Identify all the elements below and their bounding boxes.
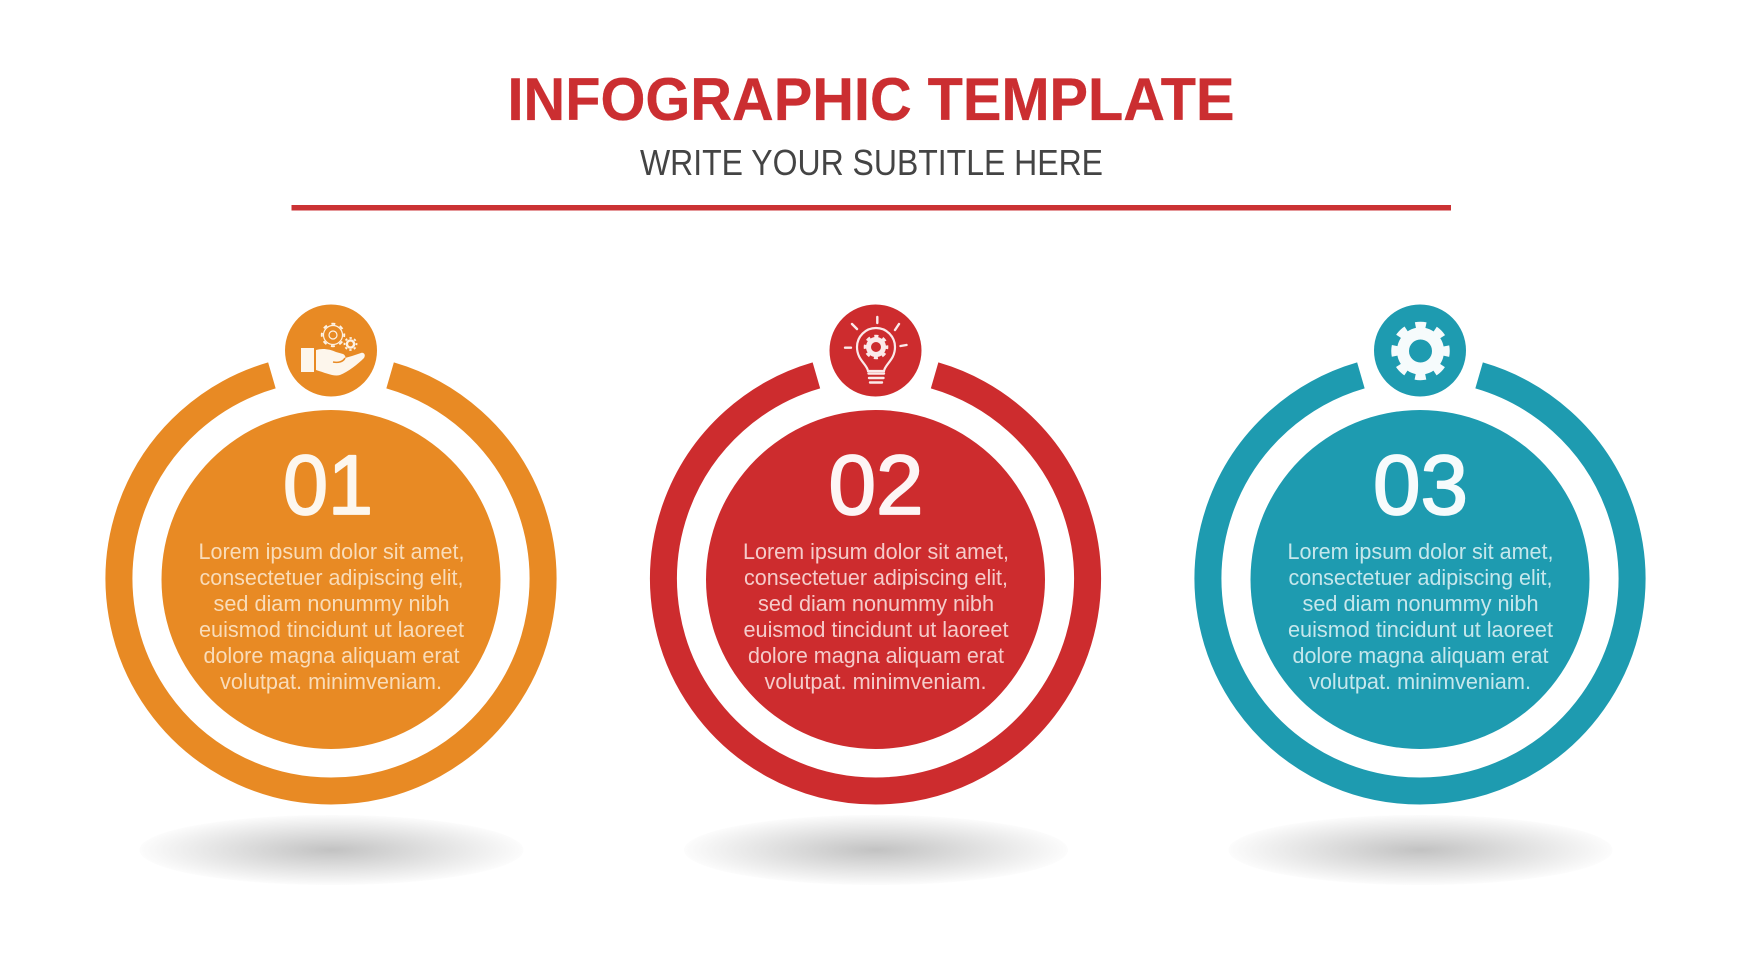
body text 02: euismod tincidunt ut laoreet [744, 617, 1008, 642]
number 02: 02 [828, 438, 924, 532]
title: INFOGRAPHIC TEMPLATE [508, 65, 1234, 133]
body text 03: Lorem ipsum dolor sit amet, [1288, 539, 1554, 564]
floor shadow 02 [684, 815, 1068, 885]
icon: gear [1374, 304, 1466, 396]
outer ring 03 [1208, 375, 1632, 791]
outer ring 02 [664, 375, 1088, 791]
body text 01: sed diam nonummy nibh [214, 591, 450, 616]
body text 01: volutpat. minimveniam. [220, 669, 442, 694]
panel: step 01 orange [119, 304, 543, 885]
body text 03: consectetuer adipiscing elit, [1288, 565, 1552, 590]
body text 03 [1288, 539, 1554, 694]
inner disc 01 [162, 410, 500, 749]
panel: step 02 red [664, 304, 1088, 885]
body text 01: consectetuer adipiscing elit, [200, 565, 464, 590]
floor shadow 03 [1228, 815, 1612, 885]
icon: hand holding gears [285, 304, 377, 396]
body text 02: sed diam nonummy nibh [758, 591, 994, 616]
inner disc 03 [1250, 410, 1590, 749]
floor shadow 01 [140, 815, 524, 885]
body text 03: euismod tincidunt ut laoreet [1288, 617, 1553, 642]
body text 02: dolore magna aliquam erat [748, 643, 1004, 668]
body text 03: dolore magna aliquam erat [1292, 643, 1548, 668]
body text 02: volutpat. minimveniam. [764, 669, 986, 694]
body text 03: sed diam nonummy nibh [1302, 591, 1538, 616]
body text 02: consectetuer adipiscing elit, [744, 565, 1008, 590]
body text 02 [743, 539, 1009, 694]
outer ring 01 [119, 375, 543, 791]
body text 03: volutpat. minimveniam. [1309, 669, 1531, 694]
panel: step 03 teal [1208, 304, 1632, 885]
number 03: 03 [1373, 438, 1468, 532]
body text 01: dolore magna aliquam erat [204, 643, 460, 668]
subtitle: WRITE YOUR SUBTITLE HERE [640, 142, 1103, 183]
body text 02: Lorem ipsum dolor sit amet, [743, 539, 1009, 564]
body text 01: Lorem ipsum dolor sit amet, [198, 539, 464, 564]
inner disc 02 [706, 410, 1045, 749]
body text 01: euismod tincidunt ut laoreet [199, 617, 464, 642]
body text 01 [198, 539, 464, 694]
header divider line [292, 205, 1451, 210]
icon: light bulb with gear [830, 304, 922, 396]
number 01: 01 [283, 438, 373, 532]
